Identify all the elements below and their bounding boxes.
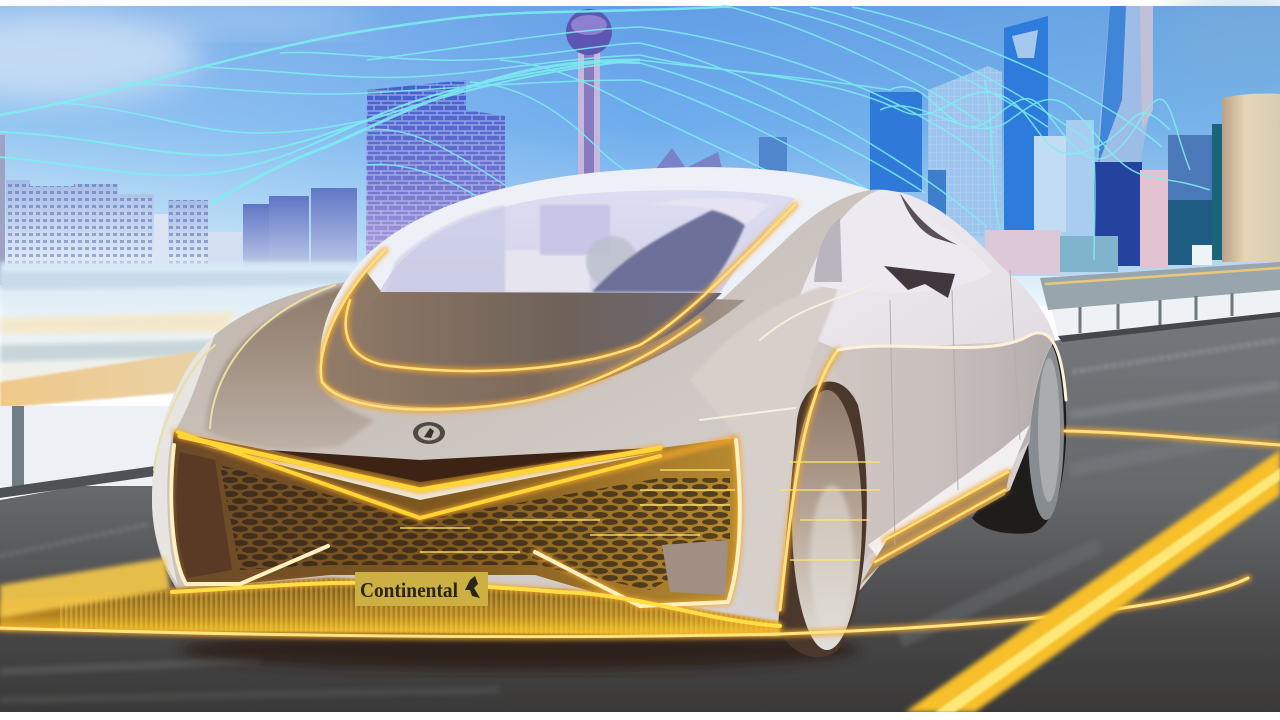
sky with soft clouds: [0, 0, 1280, 306]
car body silhouette: [152, 167, 1055, 625]
car: white sill: [868, 425, 1030, 560]
car: outer loop panel: [321, 270, 745, 407]
car: city reflected in windscreen: [385, 198, 770, 292]
city skyline: right towers: [870, 6, 1280, 274]
gold light band on the road, left: [0, 558, 170, 618]
sparks across grille and front wheel: [400, 462, 880, 560]
road surface: [0, 310, 1280, 712]
car: front fender: [690, 280, 840, 610]
city skyline: left apartment blocks: [0, 135, 357, 285]
car shadow on the road: [180, 630, 860, 670]
gold energy line glow: [0, 205, 1280, 636]
car: lower windscreen reflection: [358, 292, 722, 369]
road motion streaks: [0, 340, 1280, 700]
right barrier: [1040, 262, 1280, 342]
car: side windows: [812, 193, 992, 298]
car: windscreen glass: [380, 190, 795, 293]
left barrier: [0, 350, 205, 498]
icon: prancing horse: [465, 576, 480, 598]
car: lower sill shadow: [860, 470, 1010, 585]
car: left fender highlight: [152, 335, 215, 585]
car: lower door panel: [830, 332, 1053, 565]
gold energy line core: [0, 205, 1280, 636]
car: door lines: [890, 270, 1020, 545]
front grille housing: [171, 432, 740, 606]
front wheel: [778, 381, 867, 657]
gold light band on the road, right: [905, 450, 1280, 712]
car: upper side panel: [790, 190, 1055, 350]
badge on the bonnet: [413, 422, 445, 444]
licence plate with Continental logo: [355, 572, 488, 606]
licence plate with Continental logo: Continental: [360, 578, 458, 602]
car: left bonnet panel: [205, 285, 375, 450]
left haze and blurred highway: [0, 262, 370, 392]
car: canopy white glow: [320, 167, 870, 396]
halftone gold field below the bumper: [0, 578, 780, 636]
rear wheel: [972, 330, 1066, 534]
city skyline: central brick tower and TV tower: [366, 9, 787, 270]
bottom white frame: [0, 712, 1280, 720]
glowing data waves over the skyline: [0, 6, 1210, 260]
